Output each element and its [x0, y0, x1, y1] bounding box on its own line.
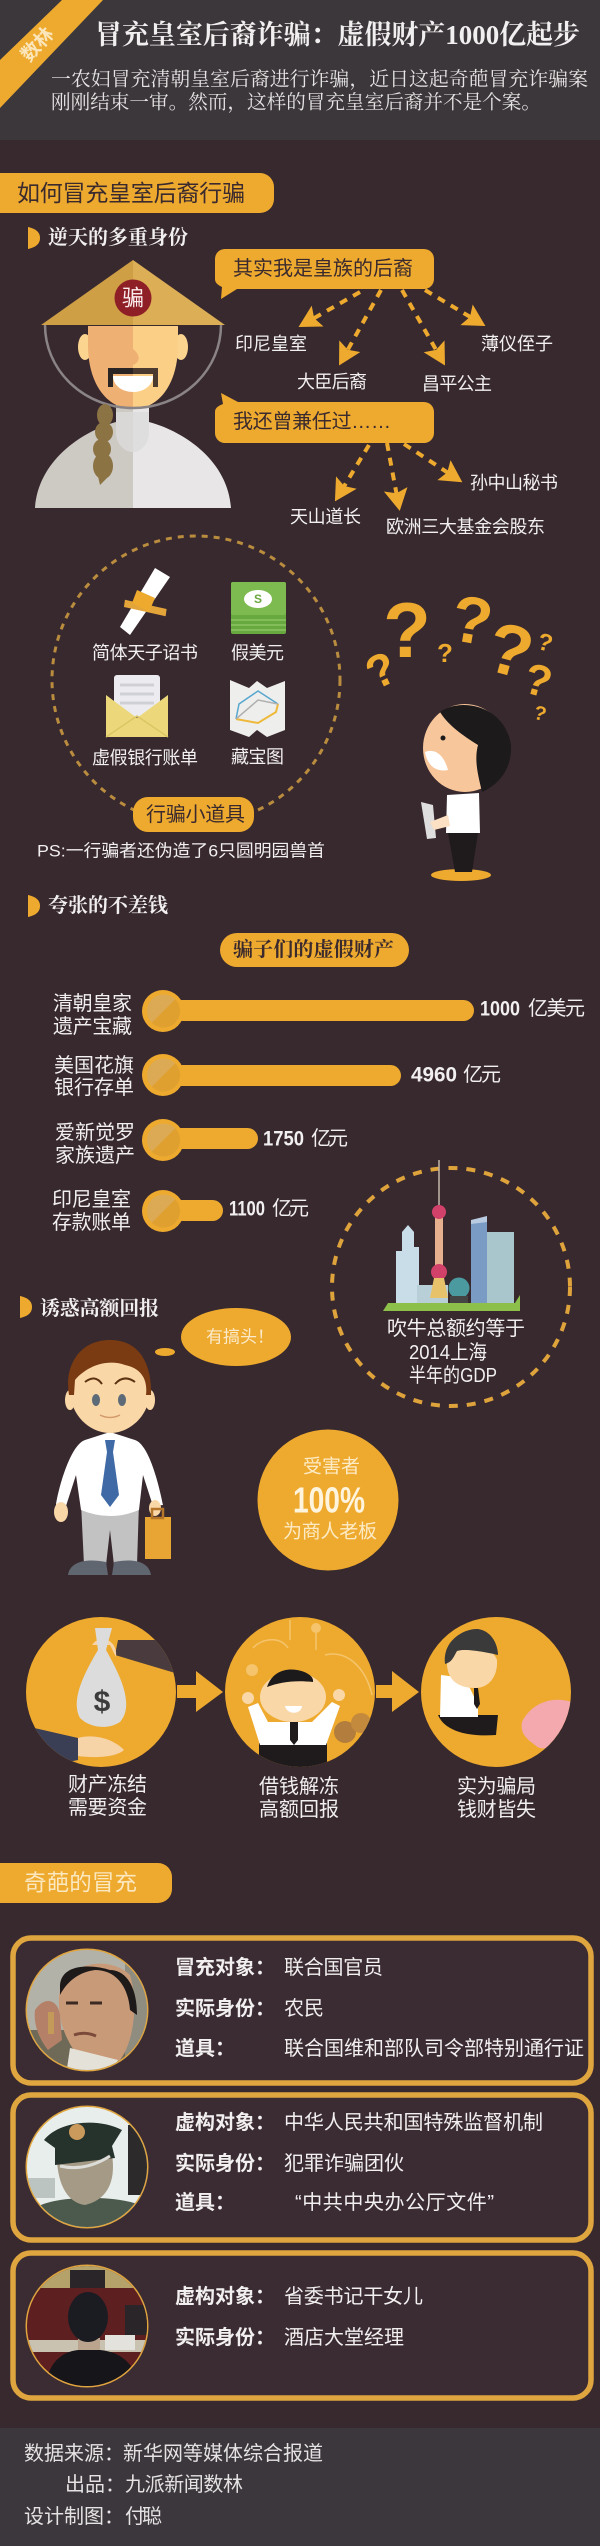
panel: fraud props circle	[52, 536, 340, 832]
case 2 text: 虚构对象：	[175, 2110, 275, 2134]
step captions: 实为骗局	[457, 1775, 536, 1798]
case 3 text: 实际身份：	[175, 2325, 275, 2349]
case 1 text: 冒充对象：	[175, 1955, 275, 1979]
label: dollars: 假美元	[231, 643, 284, 663]
panel: case 1	[13, 1938, 591, 2083]
ribbon tag	[0, 0, 103, 108]
case 1 text: 农民	[284, 1997, 324, 2020]
section heading: weird impersonations: 奇葩的冒充	[24, 1870, 137, 1896]
panel: case 3	[13, 2253, 591, 2398]
step 2: borrow money	[225, 1617, 375, 1771]
photo: case 1	[25, 1948, 150, 2075]
case 2 text	[175, 2110, 543, 2214]
step 3: scam	[421, 1617, 572, 1767]
case 2 text: 实际身份：	[175, 2151, 275, 2175]
royal claim labels: 印尼皇室	[235, 334, 307, 354]
footer credits: 付聪	[125, 2505, 162, 2528]
position labels: 天山道长	[290, 507, 361, 527]
step captions: 钱财皆失	[457, 1798, 536, 1821]
intro text: 一农妇冒充清朝皇室后裔进行诈骗，近日这起奇葩冒充诈骗案	[51, 68, 588, 90]
row: Aisin Gioro: 1750	[263, 1128, 304, 1150]
footer credits: 九派新闻数林	[125, 2473, 243, 2496]
position labels: 孙中山秘书	[470, 473, 558, 493]
position labels	[290, 473, 558, 537]
royal claim labels: 薄仪侄子	[481, 334, 553, 354]
question marks: ?	[357, 640, 405, 700]
case 3 text	[175, 2284, 423, 2349]
step captions	[68, 1773, 536, 1821]
question marks: ?	[446, 580, 498, 660]
question marks	[357, 580, 557, 726]
figure: businessman	[54, 1340, 171, 1575]
thought bubble	[155, 1308, 291, 1366]
icon: Shanghai skyline	[383, 1160, 520, 1311]
row: Indonesian royal: 1100	[229, 1198, 265, 1220]
conical hat	[41, 260, 225, 325]
speech bubble 1	[215, 249, 434, 299]
icon: fake dollars	[231, 582, 286, 634]
dashed arrows: royal claims	[302, 290, 482, 362]
GDP caption	[387, 1317, 525, 1387]
section heading: weird impersonations	[0, 1863, 172, 1903]
PS note: PS:一行骗者还伪造了6只圆明园兽首	[37, 842, 325, 860]
label: scroll: 简体天子诏书	[92, 643, 198, 663]
case 3 text: 虚构对象：	[175, 2284, 275, 2308]
row: Qing royal: 亿美元	[528, 997, 585, 1020]
row: Qing royal: 遗产宝藏	[53, 1015, 132, 1038]
row: Indonesian royal: 存款账单	[52, 1211, 131, 1234]
row: Qing royal: 1000	[480, 998, 520, 1020]
ears	[78, 334, 188, 360]
icon: fake dollars: S	[254, 592, 262, 606]
question marks: ?	[519, 654, 557, 708]
face	[88, 326, 178, 409]
callout: victims 100% business owners: 100%	[293, 1480, 365, 1520]
arrow 2	[376, 1671, 419, 1712]
pill: props: 行骗小道具	[146, 803, 245, 826]
icon: bank envelope	[106, 675, 168, 737]
case 2 text: 中华人民共和国特殊监督机制	[284, 2111, 543, 2134]
case 1 text	[175, 1955, 584, 2060]
row: Citibank: 银行存单	[54, 1076, 134, 1099]
pill: fake assets	[220, 933, 409, 967]
step captions: 借钱解冻	[259, 1775, 339, 1798]
row: Aisin Gioro: 爱新觉罗	[55, 1121, 135, 1144]
case 2 text: 道具：	[175, 2191, 235, 2214]
row: Indonesian royal: 印尼皇室	[52, 1188, 131, 1211]
speech bubble 1: 其实我是皇族的后裔	[233, 257, 413, 280]
ribbon tag: 数林	[17, 23, 59, 66]
case 1 text: 实际身份：	[175, 1996, 275, 2020]
question marks: ?	[534, 628, 556, 658]
section heading: how to impersonate	[0, 173, 274, 213]
mouth	[113, 376, 153, 392]
question marks: ?	[531, 702, 549, 726]
GDP caption: 半年的GDP	[409, 1364, 497, 1387]
question marks: ?	[437, 638, 453, 668]
photo: case 2	[25, 2106, 150, 2232]
callout: victims 100% business owners: 为商人老板	[283, 1520, 377, 1542]
step captions: 需要资金	[68, 1796, 147, 1819]
footer credits	[0, 2428, 600, 2546]
red badge	[114, 280, 152, 316]
braid	[93, 404, 113, 485]
footer credits: 数据来源：	[24, 2442, 124, 2465]
label: envelope: 虚假银行账单	[92, 748, 198, 768]
question marks: ?	[478, 607, 542, 695]
red badge: 骗	[122, 286, 144, 310]
royal claim labels: 昌平公主	[422, 374, 492, 394]
row: Citibank: 美国花旗	[54, 1054, 134, 1077]
position labels: 欧洲三大基金会股东	[386, 517, 545, 537]
footer credits: 设计制图：	[24, 2505, 124, 2528]
subheading: identities: 逆天的多重身份	[48, 226, 188, 249]
row: Citibank: 亿元	[463, 1063, 501, 1086]
case 2 text: “中共中央办公厅文件”	[295, 2191, 494, 2214]
step captions: 财产冻结	[68, 1773, 147, 1796]
pill: props	[133, 797, 254, 832]
row: Indonesian royal: 亿元	[272, 1197, 309, 1220]
figure: confused person	[421, 704, 511, 881]
case 1 text: 联合国官员	[284, 1956, 383, 1979]
panel: case 2	[13, 2095, 591, 2240]
row: Indonesian royal	[52, 1188, 309, 1234]
case 2 text: 犯罪诈骗团伙	[284, 2152, 404, 2175]
row: Citibank	[54, 1054, 501, 1099]
header band	[0, 0, 600, 140]
photo: case 3	[25, 2264, 150, 2390]
case 3 text: 省委书记干女儿	[284, 2285, 423, 2308]
row: Qing royal	[53, 990, 585, 1038]
GDP caption: 2014上海	[409, 1341, 487, 1364]
thought bubble: 有搞头！	[206, 1328, 274, 1346]
arrow 1	[177, 1671, 223, 1712]
pill: fake assets: 骗子们的虚假财产	[233, 937, 394, 961]
row: Aisin Gioro	[55, 1119, 348, 1167]
speech bubble 2	[215, 393, 434, 443]
title: 冒充皇室后裔诈骗：虚假财产1000亿起步	[95, 19, 580, 50]
question marks: ?	[383, 586, 431, 674]
panel: Shanghai GDP comparison	[332, 1160, 570, 1406]
royal claim labels: 大臣后裔	[297, 372, 367, 392]
step captions: 高额回报	[259, 1798, 339, 1821]
intro text: 刚刚结束一审。然而，这样的冒充皇室后裔并不是个案。	[51, 92, 541, 114]
section heading: how to impersonate: 如何冒充皇室后裔行骗	[17, 180, 245, 206]
row: Aisin Gioro: 亿元	[311, 1127, 348, 1150]
icon: imperial scroll	[120, 568, 170, 635]
row: Qing royal: 清朝皇家	[53, 992, 132, 1015]
case 1 text: 联合国维和部队司令部特别通行证	[284, 2037, 584, 2060]
dashed arrows: positions	[337, 443, 459, 507]
subheading: high return lure: 诱惑高额回报	[40, 1296, 159, 1320]
icon: treasure map	[230, 680, 285, 737]
footer credits: 新华网等媒体综合报道	[123, 2442, 323, 2465]
row: Citibank: 4960	[411, 1064, 457, 1086]
step 1: frozen assets: $	[94, 1686, 111, 1718]
case 1 text: 道具：	[175, 2037, 235, 2060]
speech bubble 2: 我还曾兼任过……	[233, 410, 391, 433]
step 1: frozen assets	[26, 1617, 182, 1768]
case 3 text: 酒店大堂经理	[284, 2326, 404, 2349]
row: Aisin Gioro: 家族遗产	[55, 1144, 135, 1167]
callout: victims 100% business owners: 受害者	[303, 1456, 360, 1478]
neck and robe	[35, 405, 231, 508]
royal claim labels	[235, 334, 553, 394]
bar chart: fake assets	[52, 990, 585, 1234]
footer credits: 出品：	[65, 2473, 125, 2496]
icon: fake royal with hat	[35, 260, 231, 508]
GDP caption: 吹牛总额约等于	[387, 1317, 525, 1340]
intro text	[51, 68, 588, 114]
label: map: 藏宝图	[231, 747, 284, 767]
moustache	[108, 368, 158, 387]
subheading: exaggerated money: 夸张的不差钱	[48, 893, 168, 917]
callout: victims 100% business owners	[258, 1430, 398, 1570]
